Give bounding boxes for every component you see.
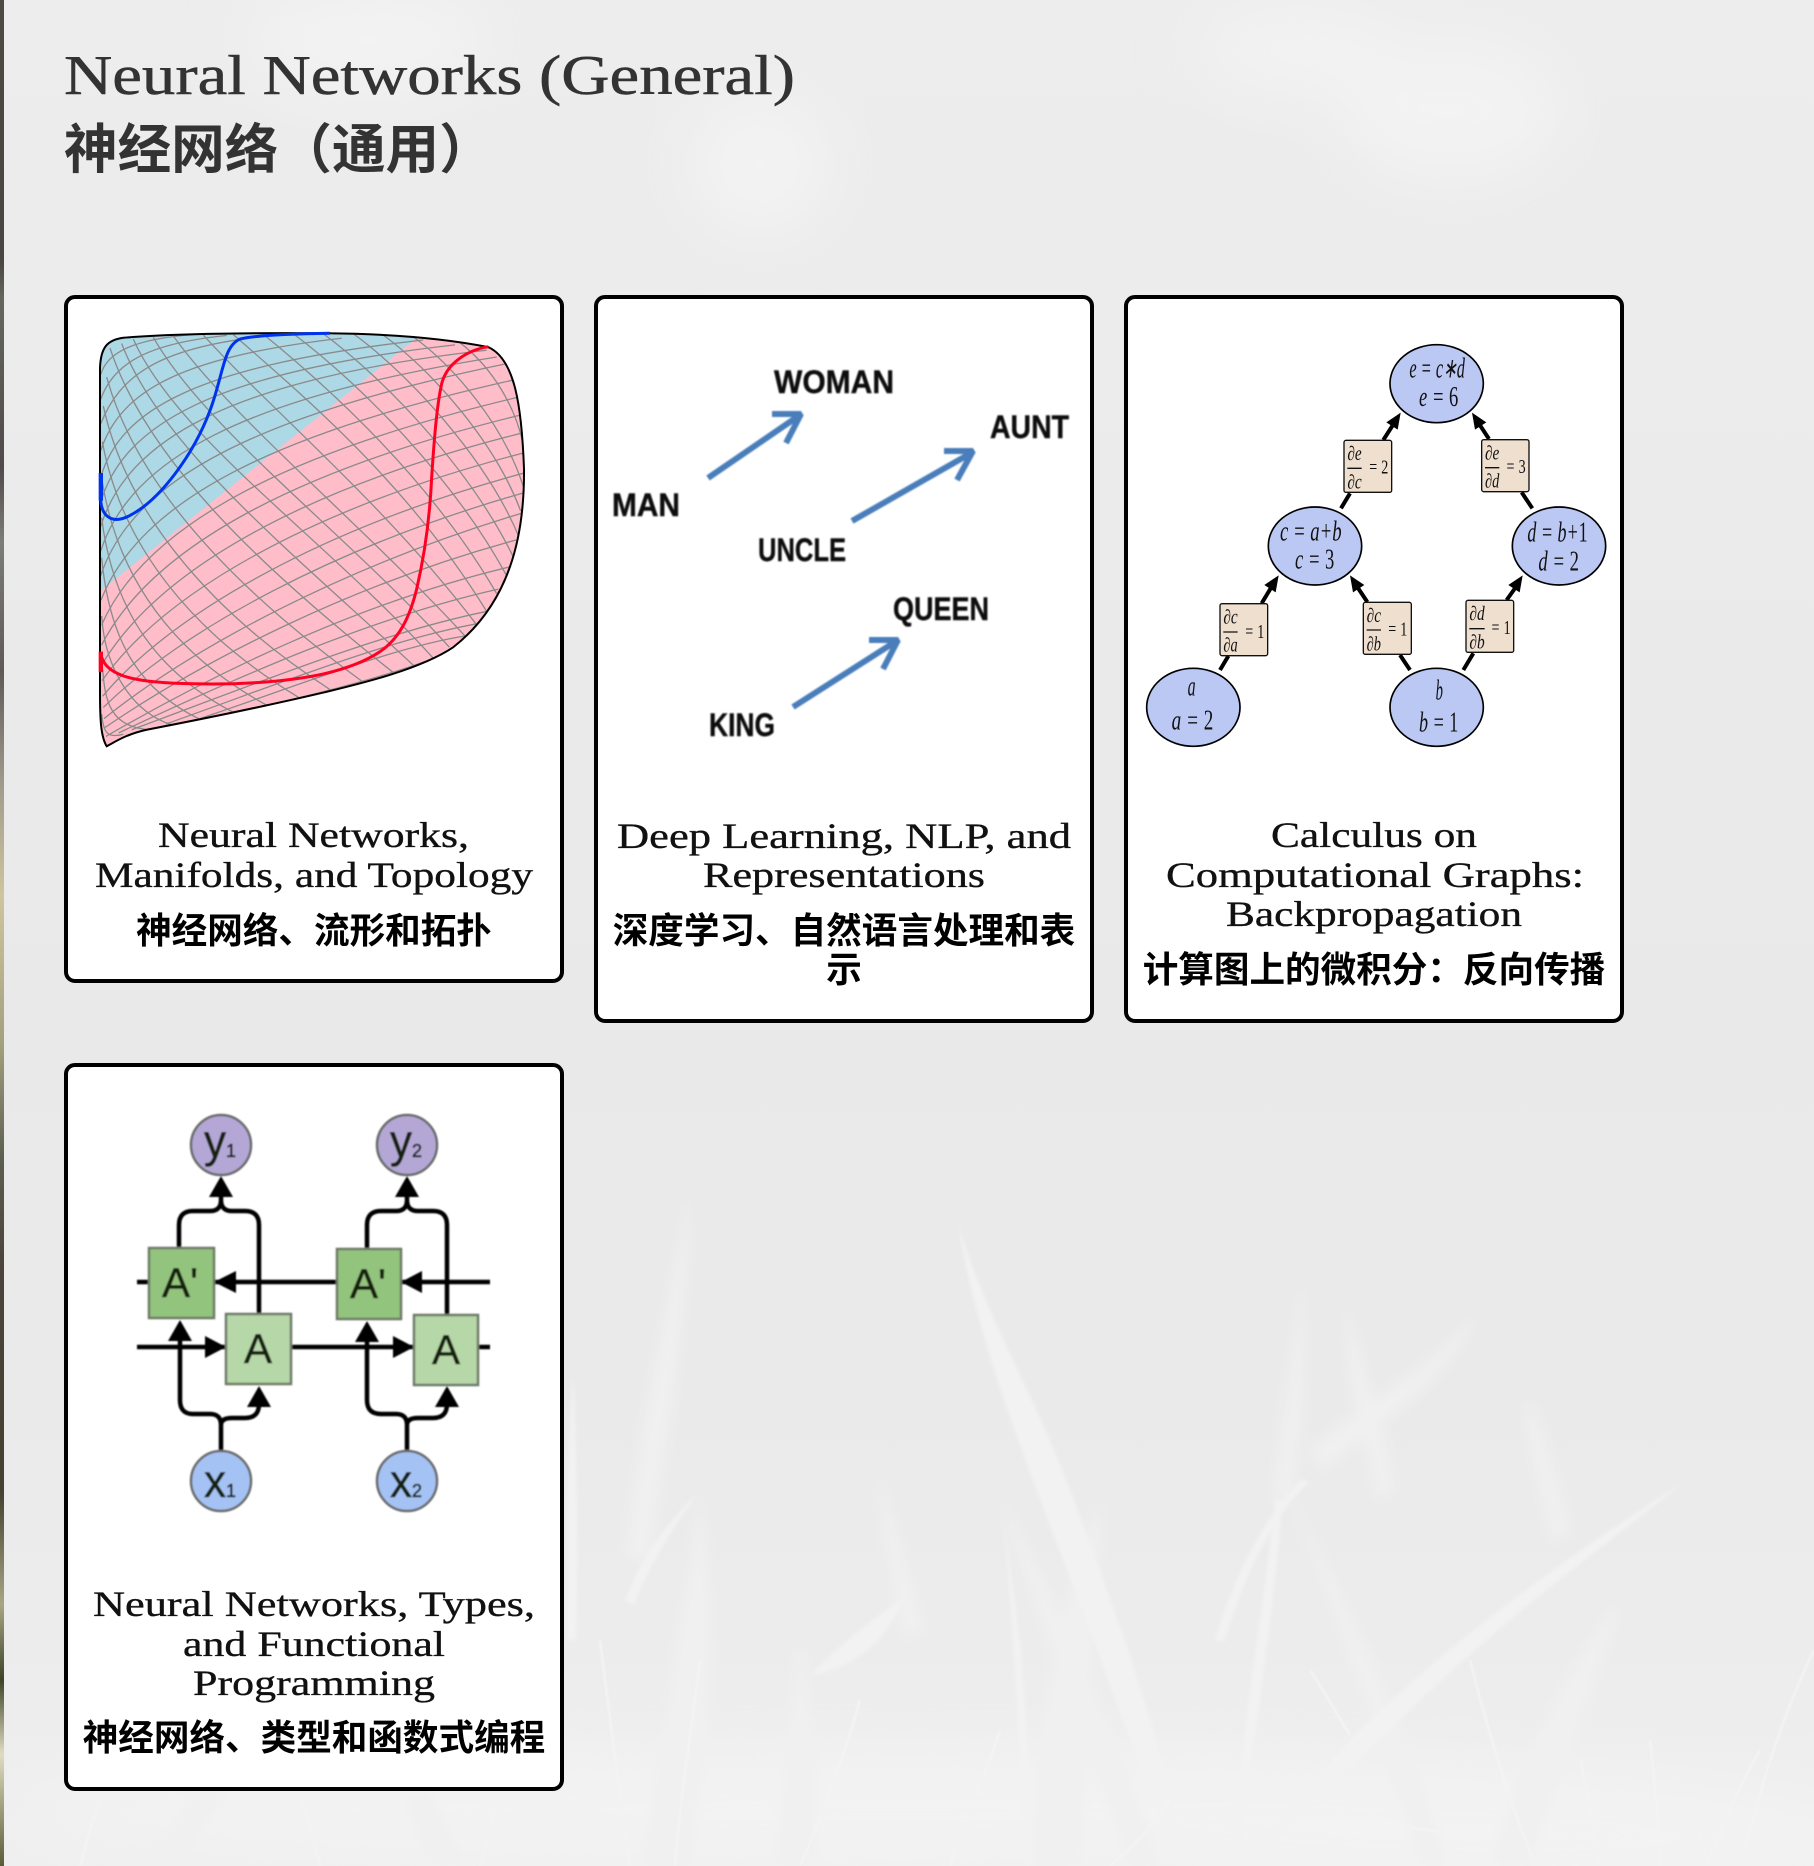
- chart: computational graph: [1147, 345, 1606, 746]
- chart: word vector analogies: WOMAN: [774, 364, 894, 400]
- caption: english: Neural Networks,: [158, 815, 469, 855]
- caption: english: [93, 1584, 535, 1703]
- chart: computational graph: b: [1436, 675, 1443, 706]
- chart: computational graph: = 1: [1244, 621, 1264, 643]
- caption: english: Calculus on: [1271, 815, 1477, 855]
- caption: chinese: 深度学习、自然语言处理和表: [613, 911, 1075, 951]
- chart: computational graph: ∂d: [1469, 603, 1485, 625]
- chart: computational graph: = 1: [1491, 617, 1511, 639]
- caption: english: Manifolds, and Topology: [95, 855, 533, 895]
- chart: computational graph: ∂a: [1223, 635, 1238, 657]
- chart: computational graph: a: [1188, 672, 1196, 703]
- chart: bidirectional RNN diagram: 2: [412, 1141, 422, 1161]
- caption: english: and Functional: [183, 1624, 445, 1664]
- panel: neural networks, manifolds and topology: [66, 297, 562, 981]
- title: [64, 45, 795, 180]
- chart: computational graph: e = c∗d: [1409, 353, 1466, 384]
- chart: computational graph: ∂b: [1367, 633, 1381, 655]
- chart: word vector analogies: KING: [709, 707, 775, 743]
- chart: bidirectional RNN diagram: A: [432, 1326, 460, 1373]
- chart: computational graph: ∂c: [1223, 606, 1238, 628]
- chart: computational graph: = 2: [1368, 457, 1388, 479]
- chart: word vector analogies: QUEEN: [893, 591, 989, 627]
- chart: bidirectional RNN diagram: [137, 1115, 490, 1511]
- caption: english: Deep Learning, NLP, and: [617, 816, 1071, 856]
- chart: computational graph: ∂c: [1347, 471, 1362, 493]
- title: 神经网络（通用）: [64, 120, 493, 180]
- chart: computational graph: a = 2: [1172, 705, 1213, 736]
- caption: chinese: 神经网络、类型和函数式编程: [83, 1718, 545, 1758]
- chart: computational graph: ∂b: [1469, 631, 1485, 653]
- chart: word vector analogies: [612, 364, 1069, 743]
- panel: neural networks, types and functional programming: [66, 1065, 562, 1789]
- chart: computational graph: c = a+b: [1280, 517, 1342, 548]
- chart: bidirectional RNN diagram: A': [350, 1260, 386, 1307]
- caption: english: [95, 815, 533, 895]
- chart: bidirectional RNN diagram: A: [244, 1325, 272, 1372]
- chart: computational graph: b = 1: [1419, 708, 1458, 739]
- chart: bidirectional RNN diagram: x: [390, 1455, 412, 1507]
- caption: english: Backpropagation: [1226, 894, 1522, 934]
- chart: computational graph: ∂e: [1347, 443, 1362, 465]
- panel: deep learning, NLP and representations: [596, 297, 1092, 1021]
- chart: computational graph: e = 6: [1419, 382, 1458, 413]
- chart: word vector analogies: AUNT: [990, 409, 1069, 445]
- chart: bidirectional RNN diagram: y: [390, 1115, 412, 1167]
- caption: english: Neural Networks, Types,: [93, 1584, 535, 1624]
- chart: computational graph: ∂d: [1485, 471, 1500, 493]
- caption: chinese: 示: [826, 950, 862, 990]
- chart: computational graph: c = 3: [1295, 544, 1334, 575]
- chart: bidirectional RNN diagram: 1: [226, 1481, 236, 1501]
- caption: english: Programming: [193, 1663, 435, 1703]
- chart: computational graph: ∂c: [1367, 605, 1381, 627]
- caption: chinese: [613, 911, 1075, 990]
- chart: bidirectional RNN diagram: 1: [226, 1141, 236, 1161]
- panel: calculus on computational graphs: [1126, 297, 1622, 1021]
- chart: computational graph: = 1: [1387, 619, 1407, 641]
- left edge photo strip: [0, 0, 4, 1866]
- caption: english: Representations: [703, 855, 985, 895]
- chart: bidirectional RNN diagram: y: [204, 1115, 226, 1167]
- chart: computational graph: ∂e: [1485, 442, 1499, 464]
- chart: bidirectional RNN diagram: A': [162, 1259, 198, 1306]
- title: Neural Networks (General): [64, 45, 795, 107]
- chart: computational graph: d = b+1: [1527, 518, 1588, 549]
- caption: english: Computational Graphs:: [1166, 855, 1584, 895]
- caption: english: [1166, 815, 1584, 934]
- caption: english: [617, 816, 1071, 895]
- chart: bidirectional RNN diagram: x: [204, 1455, 226, 1507]
- chart: manifold grid with blue and red curves: [93, 326, 530, 754]
- chart: word vector analogies: UNCLE: [758, 532, 846, 568]
- caption: chinese: 计算图上的微积分：反向传播: [1143, 950, 1605, 990]
- caption: chinese: 神经网络、流形和拓扑: [136, 911, 492, 951]
- chart: computational graph: = 3: [1506, 456, 1526, 478]
- chart: bidirectional RNN diagram: 2: [412, 1481, 422, 1501]
- chart: word vector analogies: MAN: [612, 487, 680, 523]
- chart: computational graph: d = 2: [1538, 547, 1579, 578]
